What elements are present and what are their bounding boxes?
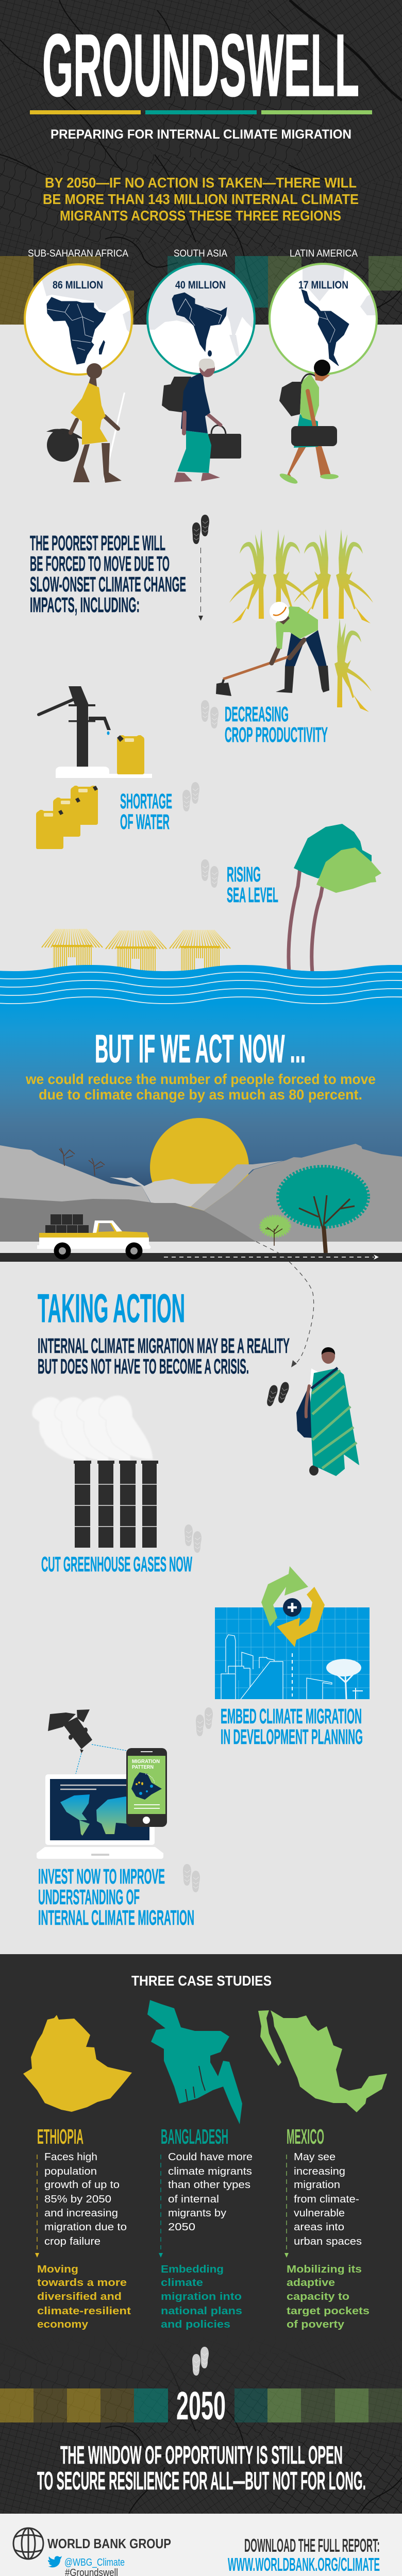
- text: CUT GREENHOUSE GASES NOW: [41, 1552, 192, 1576]
- case study: Mexico: target pockets: [287, 2306, 370, 2317]
- label: invest now: INVEST NOW TO IMPROVE: [38, 1865, 165, 1888]
- act now statement: we could reduce the number of people forced to move: [25, 1071, 376, 1087]
- truck: [37, 1214, 150, 1259]
- icon: twitter bird: [48, 2556, 62, 2567]
- case study: Mexico: adaptive: [287, 2277, 335, 2289]
- smartphone: [126, 1748, 167, 1827]
- case study: Ethiopia: Faces high: [44, 2151, 97, 2163]
- woman in sari: [296, 1347, 359, 1476]
- label: decreasing crop productivity: DECREASING: [225, 702, 289, 726]
- case study: Mexico: of poverty: [287, 2319, 345, 2330]
- case study: Ethiopia: economy: [37, 2319, 89, 2330]
- bare trees on hill: [59, 1148, 105, 1176]
- sea waves: [0, 965, 402, 1005]
- case study: Mexico: vulnerable: [294, 2208, 345, 2219]
- footprints: [192, 515, 209, 544]
- label: rising sea level: [201, 859, 278, 907]
- case study: Ethiopia: towards a more: [37, 2277, 127, 2289]
- case study: Bangladesh: Could have more: [168, 2151, 253, 2163]
- World Bank Group logo: WORLD BANK GROUP: [47, 2536, 171, 2551]
- map: Bangladesh: [147, 2000, 242, 2124]
- case study: Ethiopia: diversified and: [37, 2291, 122, 2302]
- case study: Ethiopia: and increasing: [44, 2208, 118, 2219]
- World Bank Group logo: [13, 2528, 171, 2559]
- case study: Bangladesh: climate migrants: [168, 2166, 252, 2177]
- satellite: [48, 1709, 127, 1774]
- map circle: South Asia: 40 MILLION: [175, 279, 226, 291]
- impacts intro text: THE POOREST PEOPLE WILL: [30, 531, 165, 555]
- huts: [42, 929, 230, 974]
- map: Mexico: [258, 2010, 387, 2112]
- farmer with hoe: [216, 599, 329, 696]
- region labels: [28, 248, 358, 259]
- social handles: @WBG_Climate: [64, 2557, 125, 2568]
- dark sandals: [265, 1381, 290, 1407]
- label: decreasing crop productivity: [201, 700, 328, 747]
- case study: Bangladesh: climate: [161, 2277, 203, 2289]
- case study: Ethiopia: ETHIOPIA: [37, 2125, 83, 2148]
- closing statement: [37, 2442, 366, 2495]
- label: embed climate migration: [196, 1704, 363, 1749]
- label: invest now: UNDERSTANDING OF: [38, 1885, 140, 1909]
- case study: Ethiopia: climate-resilient: [37, 2306, 131, 2317]
- case study: Mexico: May see: [294, 2151, 336, 2163]
- region labels: SOUTH ASIA: [174, 248, 227, 259]
- impacts intro text: IMPACTS, INCLUDING:: [30, 593, 140, 617]
- headline statement: [43, 175, 359, 224]
- person: elderly man with bags: [162, 359, 241, 482]
- case study: Bangladesh: than other types: [168, 2179, 250, 2191]
- taking action statement: [38, 1334, 290, 1378]
- case study: Mexico: Mobilizing its: [287, 2264, 362, 2275]
- case study: Mexico: urban spaces: [294, 2236, 362, 2247]
- label: shortage of water: OF WATER: [120, 810, 170, 834]
- case study: Bangladesh: BANGLADESH: [161, 2125, 228, 2148]
- sugar cane crop: [229, 529, 373, 712]
- case study: Mexico: increasing: [294, 2166, 345, 2177]
- case study: Mexico: [284, 2125, 370, 2330]
- impacts intro text: [30, 531, 186, 617]
- text: SEA LEVEL: [227, 883, 278, 907]
- case study: Ethiopia: 85% by 2050: [44, 2194, 111, 2205]
- text: SLOW-ONSET CLIMATE CHANGE: [30, 572, 186, 596]
- sun: [150, 1118, 249, 1217]
- headline statement: MIGRANTS ACROSS THESE THREE REGIONS: [60, 208, 341, 224]
- case study: Mexico: areas into: [294, 2222, 344, 2233]
- case study: Bangladesh: migrants by: [168, 2208, 226, 2219]
- case study: Mexico: from climate-: [294, 2194, 359, 2205]
- headline statement: BE MORE THAN 143 MILLION INTERNAL CLIMATE: [43, 191, 359, 207]
- act now statement: [25, 1071, 376, 1103]
- case study: Ethiopia: growth of up to: [44, 2179, 120, 2191]
- case study: Ethiopia: crop failure: [44, 2236, 100, 2247]
- header panel with street map: [0, 0, 402, 325]
- case study: Bangladesh: migration into: [161, 2291, 242, 2302]
- smartphone: MIGRATION: [132, 1759, 160, 1765]
- social handles: [64, 2557, 125, 2576]
- light footprints: [192, 2347, 209, 2376]
- laptop with world map: [37, 1774, 163, 1859]
- dashed arrow to taking action: [256, 1242, 314, 1367]
- case study: Bangladesh: Embedding: [161, 2264, 224, 2275]
- year 2050: 2050: [176, 2384, 226, 2428]
- map circle: Latin America: 17 MILLION: [298, 279, 348, 291]
- text: INTERNAL CLIMATE MIGRATION: [38, 1906, 194, 1929]
- case study: Bangladesh: [159, 2125, 253, 2330]
- road: [0, 1253, 402, 1262]
- factory chimneys with smoke: [32, 1395, 158, 1548]
- case study: Ethiopia: migration due to: [44, 2222, 127, 2233]
- region labels: SUB-SAHARAN AFRICA: [28, 248, 128, 259]
- case study: Mexico: migration: [294, 2179, 340, 2191]
- footer panel: [0, 2514, 402, 2576]
- sky gradient background: [0, 1002, 402, 1206]
- heading: three case studies: THREE CASE STUDIES: [131, 1973, 272, 1989]
- map circle: Sub-Saharan Africa: [25, 264, 132, 375]
- case study: Ethiopia: population: [44, 2166, 97, 2177]
- label: rising sea level: RISING: [227, 862, 261, 886]
- case study: Bangladesh: 2050: [168, 2222, 195, 2233]
- label: shortage of water: SHORTAGE: [120, 789, 172, 813]
- cycle arrows icon: [261, 1566, 325, 1647]
- blueprint city panel: [215, 1607, 370, 1699]
- label: shortage of water: [120, 782, 199, 834]
- 2050 color band: [0, 2388, 402, 2422]
- headline statement: BY 2050—IF NO ACTION IS TAKEN—THERE WILL: [45, 175, 357, 191]
- case study: Bangladesh: of internal: [168, 2194, 219, 2205]
- smartphone: PATTERN: [132, 1765, 154, 1770]
- map circle: Sub-Saharan Africa: 86 MILLION: [53, 279, 103, 291]
- label: cut greenhouse gases now: [41, 1524, 202, 1576]
- water pump: [39, 686, 152, 778]
- map circle: South Asia: [147, 264, 255, 374]
- palm trees: [289, 824, 381, 973]
- case study: Bangladesh: and policies: [161, 2319, 230, 2330]
- case study: Mexico: MEXICO: [287, 2125, 324, 2148]
- download call to action: [228, 2535, 380, 2575]
- case study: Ethiopia: [35, 2125, 131, 2330]
- dashed arrow down: [198, 548, 203, 621]
- mountains: [0, 1144, 402, 1253]
- green small tree: [261, 1216, 290, 1246]
- act now statement: due to climate change by as much as 80 percent.: [39, 1087, 362, 1103]
- subtitle: PREPARING FOR INTERNAL CLIMATE MIGRATION: [51, 127, 351, 142]
- person: woman in green with bags: [278, 360, 339, 485]
- label: invest now: [38, 1864, 200, 1929]
- map circle: Latin America: [270, 264, 377, 374]
- map: Ethiopia: [23, 2015, 132, 2112]
- title color bars: [30, 110, 372, 114]
- person: African man with yellow shirt: [46, 363, 125, 483]
- teal large tree: [279, 1167, 367, 1253]
- text: TAKING ACTION: [38, 1285, 185, 1331]
- case study: Bangladesh: national plans: [161, 2306, 242, 2317]
- case studies panel: [0, 1954, 402, 2514]
- region labels: LATIN AMERICA: [290, 248, 358, 259]
- colored region blocks: [0, 256, 402, 325]
- text: BE FORCED TO MOVE DUE TO: [30, 552, 170, 575]
- case study: Ethiopia: Moving: [37, 2264, 78, 2275]
- water cans: [36, 786, 98, 849]
- case study: Mexico: capacity to: [287, 2291, 349, 2302]
